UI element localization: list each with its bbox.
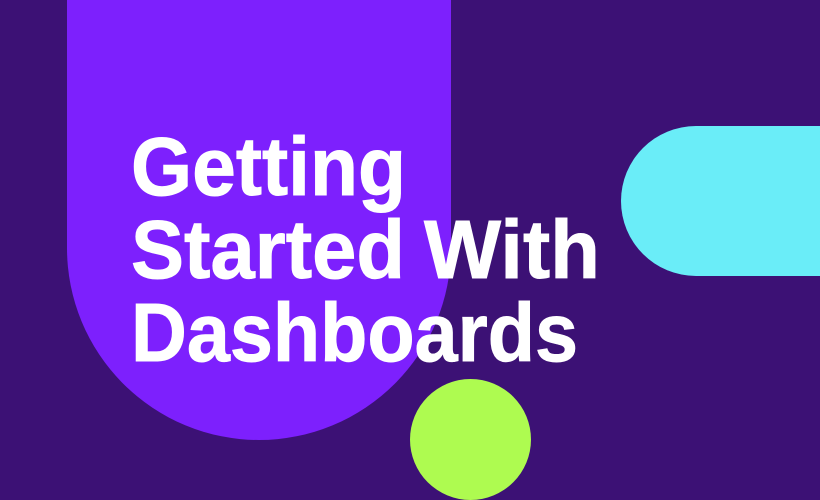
title: Getting [131,120,406,213]
title: Started [131,203,405,296]
title: Dashboards [131,286,578,379]
lime green circle [410,379,531,500]
cyan pill shape [621,126,820,276]
title: With [424,203,600,296]
purple arch shape [67,0,451,440]
title [131,120,600,379]
